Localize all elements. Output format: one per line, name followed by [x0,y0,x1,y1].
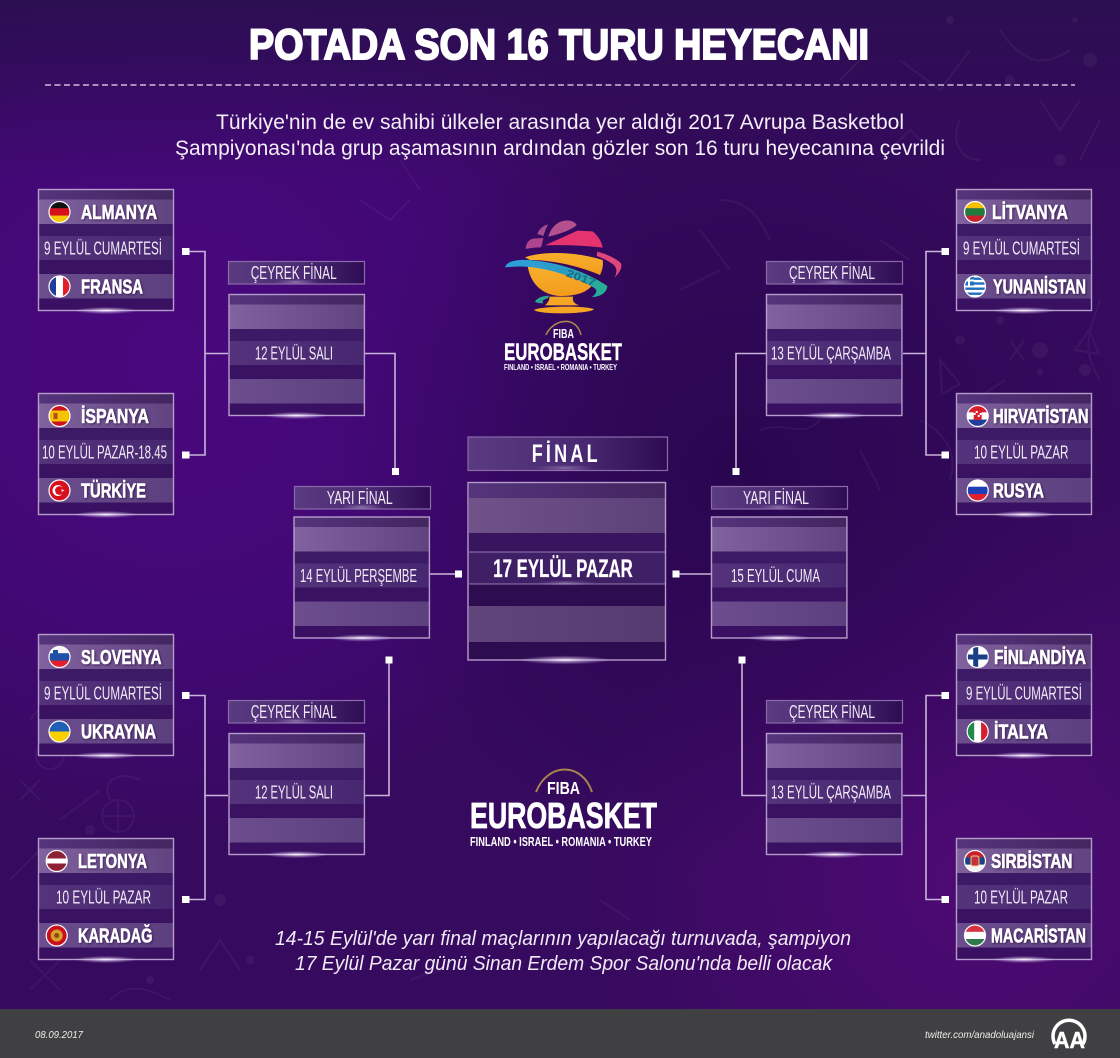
team: Letonya: LETONYA [78,851,147,873]
match date: 9 EYLÜL CUMARTESİ [44,682,162,704]
note text: 17 Eylül Pazar günü Sinan Erdem Spor Salonu'nda belli olacak [295,953,833,975]
flag: Ukraine [48,720,70,742]
panel: quarter final upper right [766,262,902,419]
team: Fransa: FRANSA [81,276,143,298]
match date: 14 EYLÜL PERŞEMBE [300,565,417,586]
team: Türkiye: TÜRKİYE [81,480,146,502]
team: Sırbistan: SIRBİSTAN [991,850,1072,873]
logo: Anadolu Agency: AA [1054,1027,1085,1053]
team: Almanya: ALMANYA [81,202,157,224]
panel: Letonya - Karadağ [38,838,174,963]
panel: semi final right [711,486,848,642]
heading: Final [468,437,668,472]
panel: Slovenya - Ukrayna [38,634,174,759]
match date: 10 EYLÜL PAZAR [56,886,151,908]
match date: 13 EYLÜL ÇARŞAMBA [771,782,891,802]
flag: Finland [967,646,989,668]
flag: Slovenia [48,646,70,668]
match date: 12 EYLÜL SALI [255,782,333,802]
team: İtalya: İTALYA [994,720,1048,744]
date: 08.09.2017 [35,1029,84,1041]
team: Hırvatistan: HIRVATİSTAN [993,405,1088,428]
connector lines: semi finals to final [430,570,711,578]
note text [275,928,851,975]
heading: Çeyrek Final [766,262,902,285]
footer [0,1009,1120,1058]
match date: 15 EYLÜL CUMA [731,565,820,586]
logo: FIBA EuroBasket: FIBA [547,778,580,798]
connector lines: upper left [182,248,399,475]
panel: Almanya - Fransa [38,189,174,314]
heading: Final: FİNAL [532,439,601,468]
flag: Latvia [46,850,68,872]
note text: 14-15 Eylül'de yarı final maçlarının yapılacağı turnuvada, şampiyon [275,928,851,950]
team: Ukrayna: UKRAYNA [81,722,156,744]
match date: 10 EYLÜL PAZAR-18.45 [42,442,167,462]
connector lines: upper right [732,248,949,475]
flag: Lithuania [964,201,986,223]
heading: Çeyrek Final [766,700,902,724]
logo wordmark: FINLAND • ISRAEL • ROMANIA • TURKEY [504,363,617,372]
heading: Çeyrek Final: ÇEYREK FİNAL [789,262,875,283]
panel: quarter final lower right [766,700,902,858]
dashed divider [45,84,1075,86]
subtitle: Türkiye'nin de ev sahibi ülkeler arasında yer aldığı 2017 Avrupa Basketbol [216,110,904,134]
team: Slovenya: SLOVENYA [81,647,162,669]
flag: Italy [967,720,989,742]
final box [468,482,666,664]
final date: 17 EYLÜL PAZAR [493,554,633,583]
panel: semi final left [294,486,430,642]
subtitle [175,110,945,160]
logo: FIBA EuroBasket: EUROBASKET [470,795,657,836]
connector lines: lower right [738,656,949,903]
panel: İspanya - Türkiye [38,393,174,518]
flag: Montenegro [46,924,68,946]
team: Macaristan: MACARİSTAN [991,924,1086,948]
panel: Litvanya - Yunanistan [956,189,1092,314]
team: İspanya: İSPANYA [81,405,149,428]
team: Rusya: RUSYA [993,480,1044,502]
team: Litvanya: LİTVANYA [992,201,1068,224]
match date: 13 EYLÜL ÇARŞAMBA [771,342,891,364]
panel: Finlandiya - İtalya [956,634,1092,759]
logo wordmark [504,321,622,372]
logo: FIBA EuroBasket [470,770,657,849]
logo wordmark: EUROBASKET [504,339,622,366]
heading: Yarı Final [712,486,848,510]
source: twitter.com/anadoluajansi [925,1029,1035,1041]
panel: Sırbistan - Macaristan [956,838,1092,963]
team: Finlandiya: FİNLANDİYA [994,646,1086,669]
heading: Yarı Final: YARI FİNAL [743,487,809,508]
logo: FIBA EuroBasket: FINLAND • ISRAEL • ROMANIA • TURKEY [470,835,652,849]
panel: quarter final lower left [228,700,365,858]
flag: Germany [48,201,70,223]
flag: Greece [964,276,986,298]
match date: 10 EYLÜL PAZAR [974,886,1068,908]
heading: Çeyrek Final [228,700,364,724]
flag: Croatia [967,405,989,427]
logo wordmark: FIBA [553,326,574,341]
match date: 9 EYLÜL CUMARTESİ [44,238,162,258]
flag: France [48,276,71,298]
flag: Serbia [964,850,986,872]
team: Yunanistan: YUNANİSTAN [993,276,1086,298]
logo: EuroBasket 2017 trophy [504,221,622,372]
match date: 12 EYLÜL SALI [255,342,333,364]
flag: Russia [967,480,989,502]
flag: Hungary [964,924,986,947]
flag: Turkey [48,480,70,502]
heading: Yarı Final: YARI FİNAL [327,487,393,508]
panel: quarter final upper left [228,262,365,419]
heading: Çeyrek Final: ÇEYREK FİNAL [251,262,337,283]
heading: Çeyrek Final [228,262,364,285]
flag: Spain [48,405,70,427]
subtitle: Şampiyonası'nda grup aşamasının ardından gözler son 16 turu heyecanına çevrildi [175,136,945,160]
team: Karadağ: KARADAĞ [78,924,152,948]
heading: Çeyrek Final: ÇEYREK FİNAL [789,701,875,722]
title: POTADA SON 16 TURU HEYECANI [249,21,869,69]
panel: final [468,437,668,664]
panel: Hırvatistan - Rusya [956,393,1092,518]
match date: 10 EYLÜL PAZAR [974,442,1068,462]
heading: Yarı Final [294,486,430,510]
logo: EuroBasket 2017 trophy: 2017 [564,268,597,289]
connector lines: lower left [182,656,392,903]
heading: Çeyrek Final: ÇEYREK FİNAL [251,701,337,722]
